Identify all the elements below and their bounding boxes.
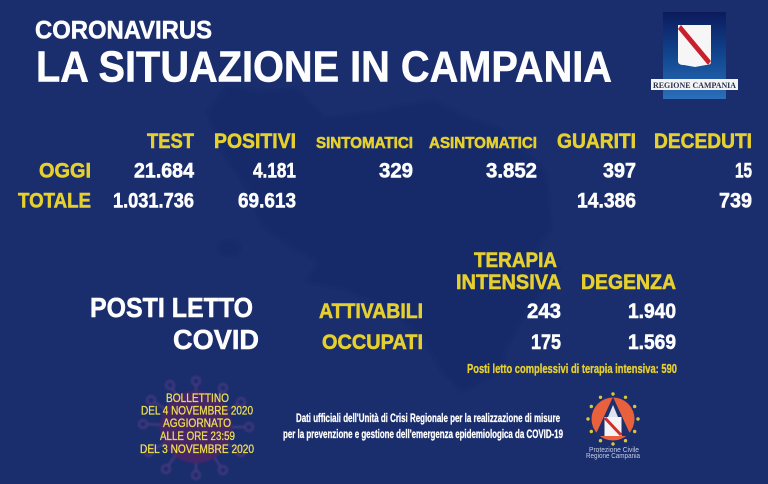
row: totale: TOTALE xyxy=(18,190,91,212)
row: totale: 69.613 xyxy=(238,190,296,212)
background map of Campania xyxy=(207,85,560,392)
row: attivabili: 243 xyxy=(527,300,561,323)
logo: Protezione Civile xyxy=(586,392,640,460)
row: totale xyxy=(18,190,752,212)
beds column headers: DEGENZA xyxy=(581,271,676,294)
row: oggi: OGGI xyxy=(39,160,91,182)
column headers: DECEDUTI xyxy=(654,130,752,153)
heading: posti letto covid: COVID xyxy=(173,324,259,355)
bulletin text: DEL 4 NOVEMBRE 2020 xyxy=(141,404,253,418)
row: occupati: OCCUPATI xyxy=(322,331,423,354)
beds column headers: INTENSIVA xyxy=(456,271,561,294)
row: occupati xyxy=(322,331,676,354)
bulletin text: BOLLETTINO xyxy=(166,391,229,405)
row: occupati: 1.569 xyxy=(628,331,676,354)
beds column headers: TERAPIA xyxy=(474,249,557,272)
row: oggi: 4.181 xyxy=(253,160,296,182)
eyebrow: coronavirus: CORONAVIRUS xyxy=(35,16,212,44)
row: totale: 1.031.736 xyxy=(113,190,194,212)
row: totale: 739 xyxy=(719,190,752,212)
row: oggi xyxy=(39,160,752,182)
hospital beds section xyxy=(90,249,677,376)
bulletin text xyxy=(140,391,254,456)
column headers xyxy=(147,130,752,153)
logo: Regione Campania xyxy=(651,12,738,99)
column headers: TEST xyxy=(147,130,194,153)
column headers: POSITIVI xyxy=(214,130,296,153)
column headers: ASINTOMATICI xyxy=(429,135,537,152)
title block xyxy=(35,16,612,92)
daily table xyxy=(18,130,752,212)
official data statement: Dati ufficiali dell'Unità di Crisi Regionale per la realizzazione di misure xyxy=(296,413,560,425)
row: oggi: 15 xyxy=(735,160,752,182)
logo label: REGIONE CAMPANIA xyxy=(653,80,737,90)
heading: posti letto covid xyxy=(90,292,259,355)
note: total intensive care beds: Posti letto complessivi di terapia intensiva: 590 xyxy=(467,362,677,376)
heading: posti letto covid: POSTI LETTO xyxy=(90,292,253,323)
column headers: GUARITI xyxy=(557,130,636,153)
bulletin text: ALLE ORE 23:59 xyxy=(160,429,235,443)
official data statement: per la prevenzione e gestione dell'emergenza epidemiologica da COVID-19 xyxy=(283,429,563,441)
row: oggi: 397 xyxy=(603,160,636,182)
emblem caption: Protezione Civile xyxy=(589,447,639,454)
bulletin with virus illustration xyxy=(139,377,254,479)
emblem caption xyxy=(586,447,640,460)
bulletin text: DEL 3 NOVEMBRE 2020 xyxy=(140,442,254,456)
row: attivabili xyxy=(319,300,676,323)
beds column headers xyxy=(456,249,676,294)
icon: orange disc with triangle xyxy=(592,397,634,440)
row: totale: 14.386 xyxy=(577,190,636,212)
bulletin text: AGGIORNATO xyxy=(163,416,231,430)
row: attivabili: ATTIVABILI xyxy=(319,300,423,323)
icon: virus xyxy=(139,377,253,479)
official data statement xyxy=(283,413,563,441)
icon: shield xyxy=(678,25,711,67)
icon: stars ring xyxy=(586,392,640,446)
column headers: SINTOMATICI xyxy=(316,135,413,152)
main title: LA SITUAZIONE IN CAMPANIA xyxy=(36,42,612,92)
row: oggi: 329 xyxy=(379,160,413,182)
row: oggi: 21.684 xyxy=(134,160,194,182)
emblem caption: Regione Campania xyxy=(586,453,640,460)
row: attivabili: 1.940 xyxy=(628,300,676,323)
row: occupati: 175 xyxy=(531,331,561,354)
row: oggi: 3.852 xyxy=(486,160,537,182)
